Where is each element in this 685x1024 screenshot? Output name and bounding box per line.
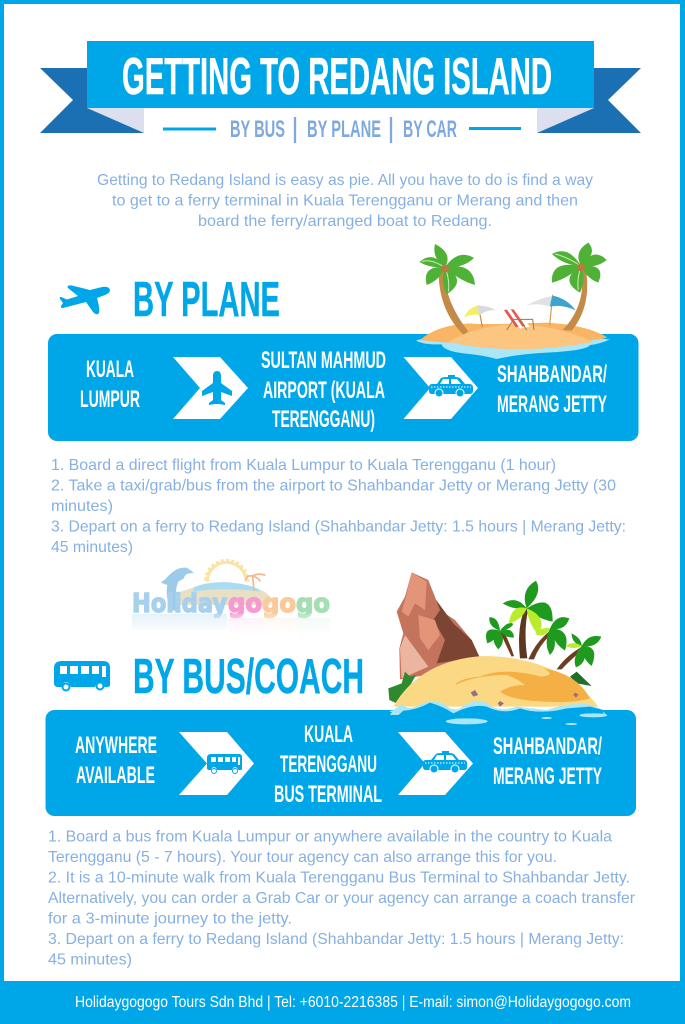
icon: plane [60, 285, 110, 314]
list: plane steps [51, 457, 626, 556]
logo wordmark: Holiday [132, 589, 227, 619]
subtitle [163, 112, 521, 143]
origin label [80, 356, 140, 413]
list: bus steps: 45 minutes) [48, 952, 132, 968]
airport label: TERENGGANU) [272, 406, 375, 433]
panel: by bus route [46, 710, 636, 816]
list: bus steps: Alternatively, you can order a Grab Car or your agency can arrange a coach transfer [48, 890, 636, 907]
list: plane steps: 1. Board a direct flight from Kuala Lumpur to Kuala Terengganu (1 hour) [51, 457, 556, 474]
arrow with taxi icon [398, 732, 473, 795]
footer bar [0, 981, 685, 1024]
intro text: board the ferry/arranged boat to Redang. [198, 213, 492, 230]
list: bus steps [48, 828, 636, 968]
jetty label [493, 733, 602, 790]
logo: Holidaygogogo: gogogo [228, 589, 330, 619]
jetty label: SHAHBANDAR/ [497, 361, 607, 388]
heading: by plane: BY PLANE [133, 273, 280, 327]
airport label [261, 347, 386, 433]
logo: Holidaygogogo [130, 560, 332, 635]
intro text [97, 172, 593, 230]
subtitle: BY PLANE [307, 116, 381, 143]
jetty label [497, 361, 607, 418]
list: plane steps: minutes) [51, 498, 113, 515]
terminal label: BUS TERMINAL [274, 781, 382, 808]
list: bus steps: 1. Board a bus from Kuala Lumpur or anywhere available in the country to Kuala [48, 828, 612, 846]
origin label: ANYWHERE [75, 732, 157, 759]
subtitle: BY BUS [230, 116, 285, 143]
jetty label: MERANG JETTY [493, 763, 602, 790]
origin label: KUALA [86, 356, 134, 383]
arrow with taxi icon [404, 357, 478, 419]
subtitle: BY CAR [403, 116, 457, 143]
origin label [75, 732, 157, 789]
airport label: SULTAN MAHMUD [261, 347, 386, 374]
origin label: LUMPUR [80, 386, 140, 413]
arrow with bus icon [179, 732, 254, 795]
jetty label: MERANG JETTY [497, 391, 607, 418]
panel: by plane route [48, 334, 638, 441]
intro text: to get to a ferry terminal in Kuala Terengganu or Merang and then [112, 192, 578, 210]
list: plane steps: 3. Depart on a ferry to Redang Island (Shahbandar Jetty: 1.5 hours | Merang Jetty: [51, 518, 626, 536]
list: bus steps: 2. It is a 10-minute walk from Kuala Terengganu Bus Terminal to Shahbandar Jetty. [48, 870, 630, 886]
intro text: Getting to Redang Island is easy as pie. All you have to do is find a way [97, 172, 593, 189]
list: bus steps: for a 3-minute journey to the jetty. [48, 910, 292, 928]
list: plane steps: 2. Take a taxi/grab/bus from the airport to Shahbandar Jetty or Merang Jetty (30 [51, 478, 616, 494]
title banner [40, 41, 641, 133]
illustration: beach island with palms [416, 243, 610, 359]
terminal label: TERENGGANU [280, 751, 377, 778]
subtitle: | [291, 112, 299, 143]
heading: by bus/coach: BY BUS/COACH [133, 650, 364, 704]
origin label: AVAILABLE [76, 762, 155, 789]
terminal label [274, 721, 382, 808]
icon: bus [54, 661, 110, 690]
logo reflection [130, 614, 332, 635]
airport label: AIRPORT (KUALA [263, 377, 385, 404]
terminal label: KUALA [304, 721, 353, 748]
footer contact text: Holidaygogogo Tours Sdn Bhd | Tel: +6010-2216385 | E-mail: simon@Holidaygogogo.com [75, 994, 631, 1011]
subtitle: | [387, 112, 395, 143]
list: plane steps: 45 minutes) [51, 539, 133, 556]
illustration: rocky island with palms [388, 572, 607, 725]
arrow with plane icon [173, 357, 248, 419]
list: bus steps: 3. Depart on a ferry to Redang Island (Shahbandar Jetty: 1.5 hours | Merang Jetty: [48, 931, 624, 948]
list: bus steps: Terengganu (5 - 7 hours). Your tour agency can also arrange this for you. [48, 849, 557, 866]
jetty label: SHAHBANDAR/ [493, 733, 602, 760]
